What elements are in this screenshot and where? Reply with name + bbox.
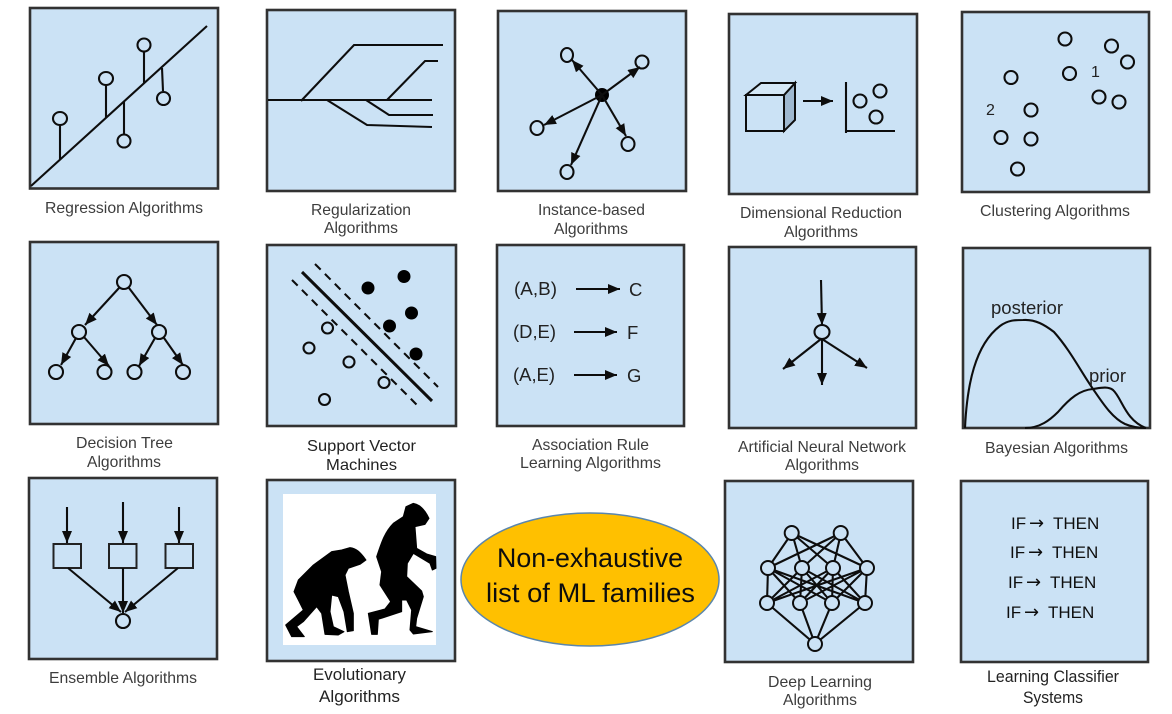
panel: evolutionary algorithms: Algorithms — [319, 688, 400, 706]
panel: support vector machines — [267, 245, 456, 474]
panel: artificial neural network algorithms: Algorithms — [785, 457, 859, 474]
icon: deep neural network — [760, 526, 874, 651]
icon: clusters: 1 — [1091, 64, 1100, 81]
panel: regularization algorithms — [267, 10, 455, 237]
diagram: association rules: G — [627, 365, 641, 386]
text: if-then rules: IF — [1006, 603, 1021, 622]
diagram: association rules — [513, 278, 642, 386]
chart: posterior and prior curves: prior — [1089, 365, 1126, 386]
image: ape and hominid silhouettes — [283, 494, 436, 645]
diagram: association rules: C — [629, 279, 642, 300]
panel: deep learning algorithms: Algorithms — [783, 692, 857, 709]
label: Artificial Neural Network — [738, 439, 906, 456]
icon: neuron — [783, 280, 867, 385]
icon: instance star — [530, 48, 648, 179]
chart: posterior and prior curves — [965, 297, 1146, 428]
callout: non-exhaustive list of ML families: list of ML families — [486, 578, 695, 608]
icon: clusters — [986, 32, 1134, 176]
panel: regularization algorithms: Algorithms — [324, 220, 398, 237]
label: Regression Algorithms — [45, 200, 203, 217]
panel: decision tree algorithms — [30, 242, 218, 471]
text: if-then rules: → — [1028, 542, 1043, 563]
panel: learning classifier systems — [961, 481, 1148, 707]
panel: clustering algorithms — [962, 12, 1149, 220]
label: Decision Tree — [76, 435, 173, 452]
text: if-then rules: THEN — [1048, 603, 1094, 622]
icon: cube to plot — [746, 82, 895, 133]
text: if-then rules: IF — [1011, 514, 1026, 533]
panel: bayesian algorithms — [963, 248, 1150, 457]
panel: dimensional reduction algorithms — [729, 14, 917, 241]
text: if-then rules: IF — [1010, 543, 1025, 562]
panel: support vector machines: Machines — [326, 457, 397, 474]
icon: separating hyperplane — [292, 264, 438, 407]
icon: decision tree — [49, 275, 190, 379]
text: if-then rules: THEN — [1052, 543, 1098, 562]
panel: decision tree algorithms: Algorithms — [87, 454, 161, 471]
panel: association rule learning algorithms — [497, 245, 684, 472]
icon: clusters: 2 — [986, 102, 995, 119]
text: if-then rules: → — [1029, 513, 1044, 534]
text: if-then rules — [1006, 513, 1099, 623]
label: Ensemble Algorithms — [49, 670, 197, 687]
callout: non-exhaustive list of ML families — [461, 513, 719, 646]
label: Instance-based — [538, 202, 645, 219]
label: Clustering Algorithms — [980, 203, 1130, 220]
diagram: association rules: (A,E) — [513, 364, 555, 385]
chart: posterior and prior curves: posterior — [991, 297, 1063, 318]
text: if-then rules: IF — [1008, 573, 1023, 592]
label: Bayesian Algorithms — [985, 440, 1128, 457]
panel: learning classifier systems: Systems — [1023, 689, 1083, 707]
panel: artificial neural network algorithms — [729, 247, 916, 474]
label: Regularization — [311, 202, 411, 219]
label: Dimensional Reduction — [740, 205, 902, 222]
label: Deep Learning — [768, 674, 872, 691]
panel: deep learning algorithms — [725, 481, 913, 709]
text: if-then rules: THEN — [1053, 514, 1099, 533]
panel: evolutionary algorithms — [267, 480, 455, 706]
diagram: association rules: (A,B) — [514, 278, 557, 299]
panel: association rule learning algorithms: Learning Algorithms — [520, 455, 661, 472]
panel: instance-based algorithms: Algorithms — [554, 221, 628, 238]
icon: regularization paths — [268, 45, 443, 127]
icon: regression line with residuals — [31, 26, 207, 186]
icon: ensemble — [54, 502, 193, 628]
label: Association Rule — [532, 437, 649, 454]
text: if-then rules: THEN — [1050, 573, 1096, 592]
text: if-then rules: → — [1024, 602, 1039, 623]
text: if-then rules: → — [1026, 572, 1041, 593]
diagram: association rules: F — [627, 322, 638, 343]
panel: instance-based algorithms — [498, 11, 686, 238]
label: Support Vector — [307, 438, 416, 455]
diagram: association rules: (D,E) — [513, 321, 556, 342]
label: Learning Classifier — [987, 668, 1119, 686]
panel: regression algorithms — [30, 8, 218, 217]
panel: dimensional reduction algorithms: Algorithms — [784, 224, 858, 241]
callout: non-exhaustive list of ML families: Non-exhaustive — [497, 543, 683, 573]
label: Evolutionary — [313, 666, 407, 684]
panel: ensemble algorithms — [29, 478, 217, 687]
